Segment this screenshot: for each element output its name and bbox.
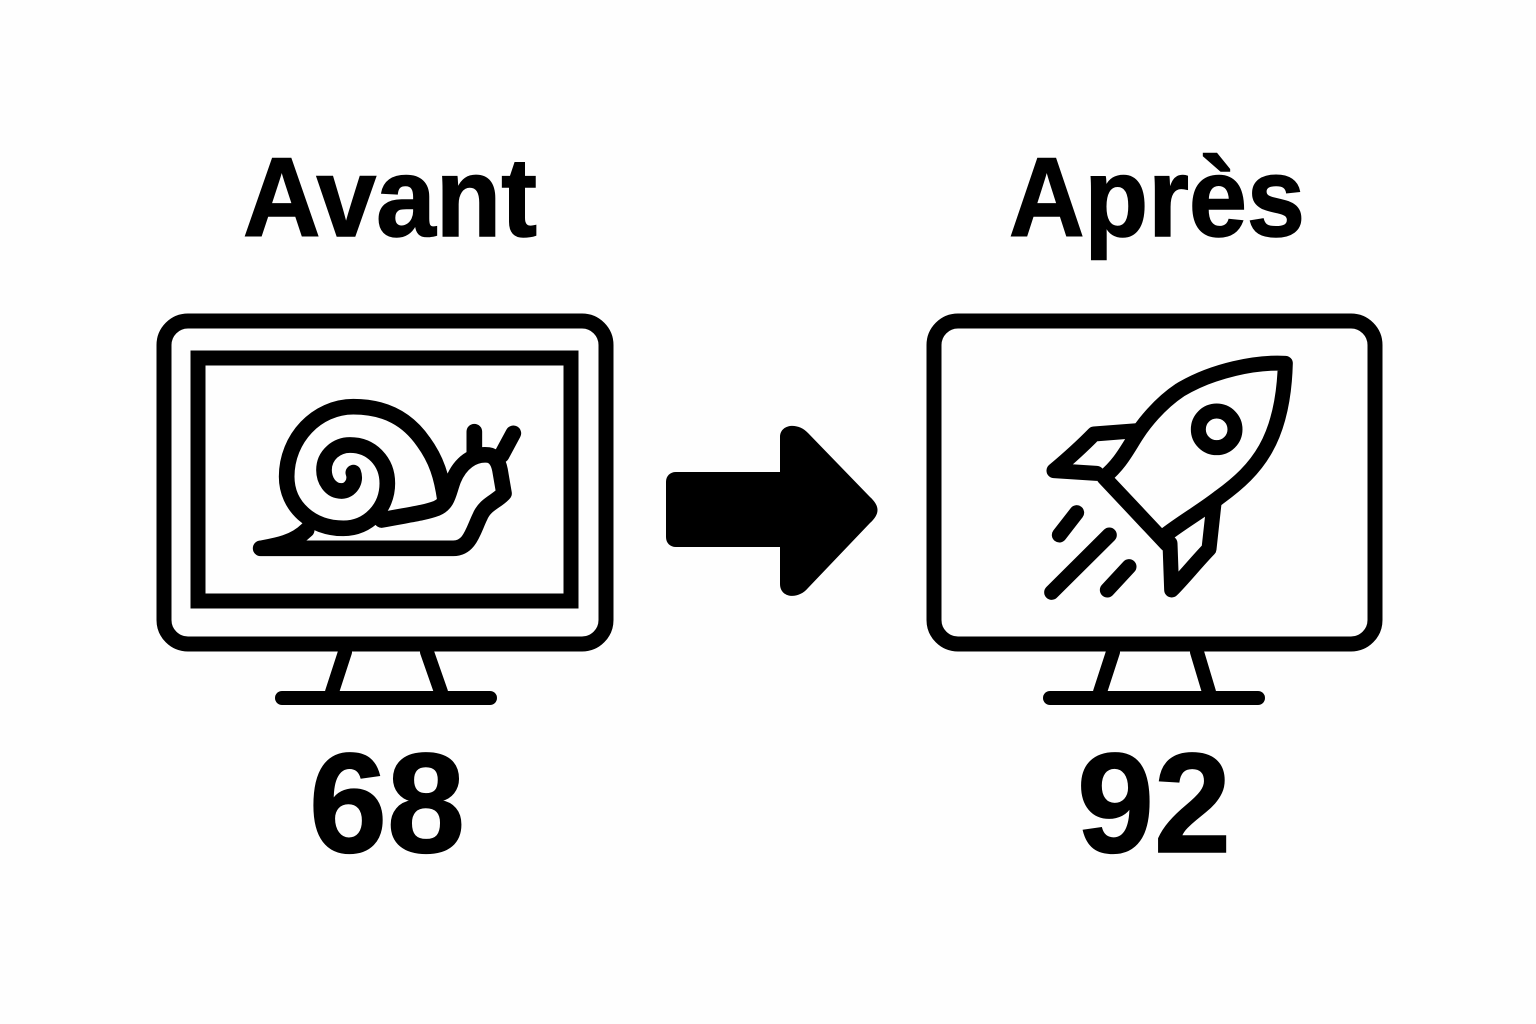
rocket body [1104, 363, 1285, 544]
rocket fins [1054, 431, 1214, 590]
icon: snail [261, 407, 513, 548]
monitor frame [934, 321, 1375, 644]
monitor frame [164, 321, 606, 644]
rocket window [1198, 411, 1235, 448]
inner screen window [198, 358, 571, 601]
score: 68: 68 [309, 724, 465, 883]
monitor: after [934, 321, 1375, 698]
heading: Après: Après [1009, 135, 1305, 260]
monitor: before [164, 321, 606, 698]
score: 92: 92 [1077, 724, 1231, 883]
monitor stand [282, 652, 490, 698]
snail antennae [474, 432, 513, 455]
arrow [666, 426, 878, 596]
heading: Avant: Avant [243, 135, 537, 260]
speed lines [1052, 513, 1129, 592]
monitor stand [1050, 652, 1258, 698]
snail shell spiral [287, 407, 445, 528]
icon: rocket [1052, 363, 1285, 592]
snail body [261, 455, 504, 548]
